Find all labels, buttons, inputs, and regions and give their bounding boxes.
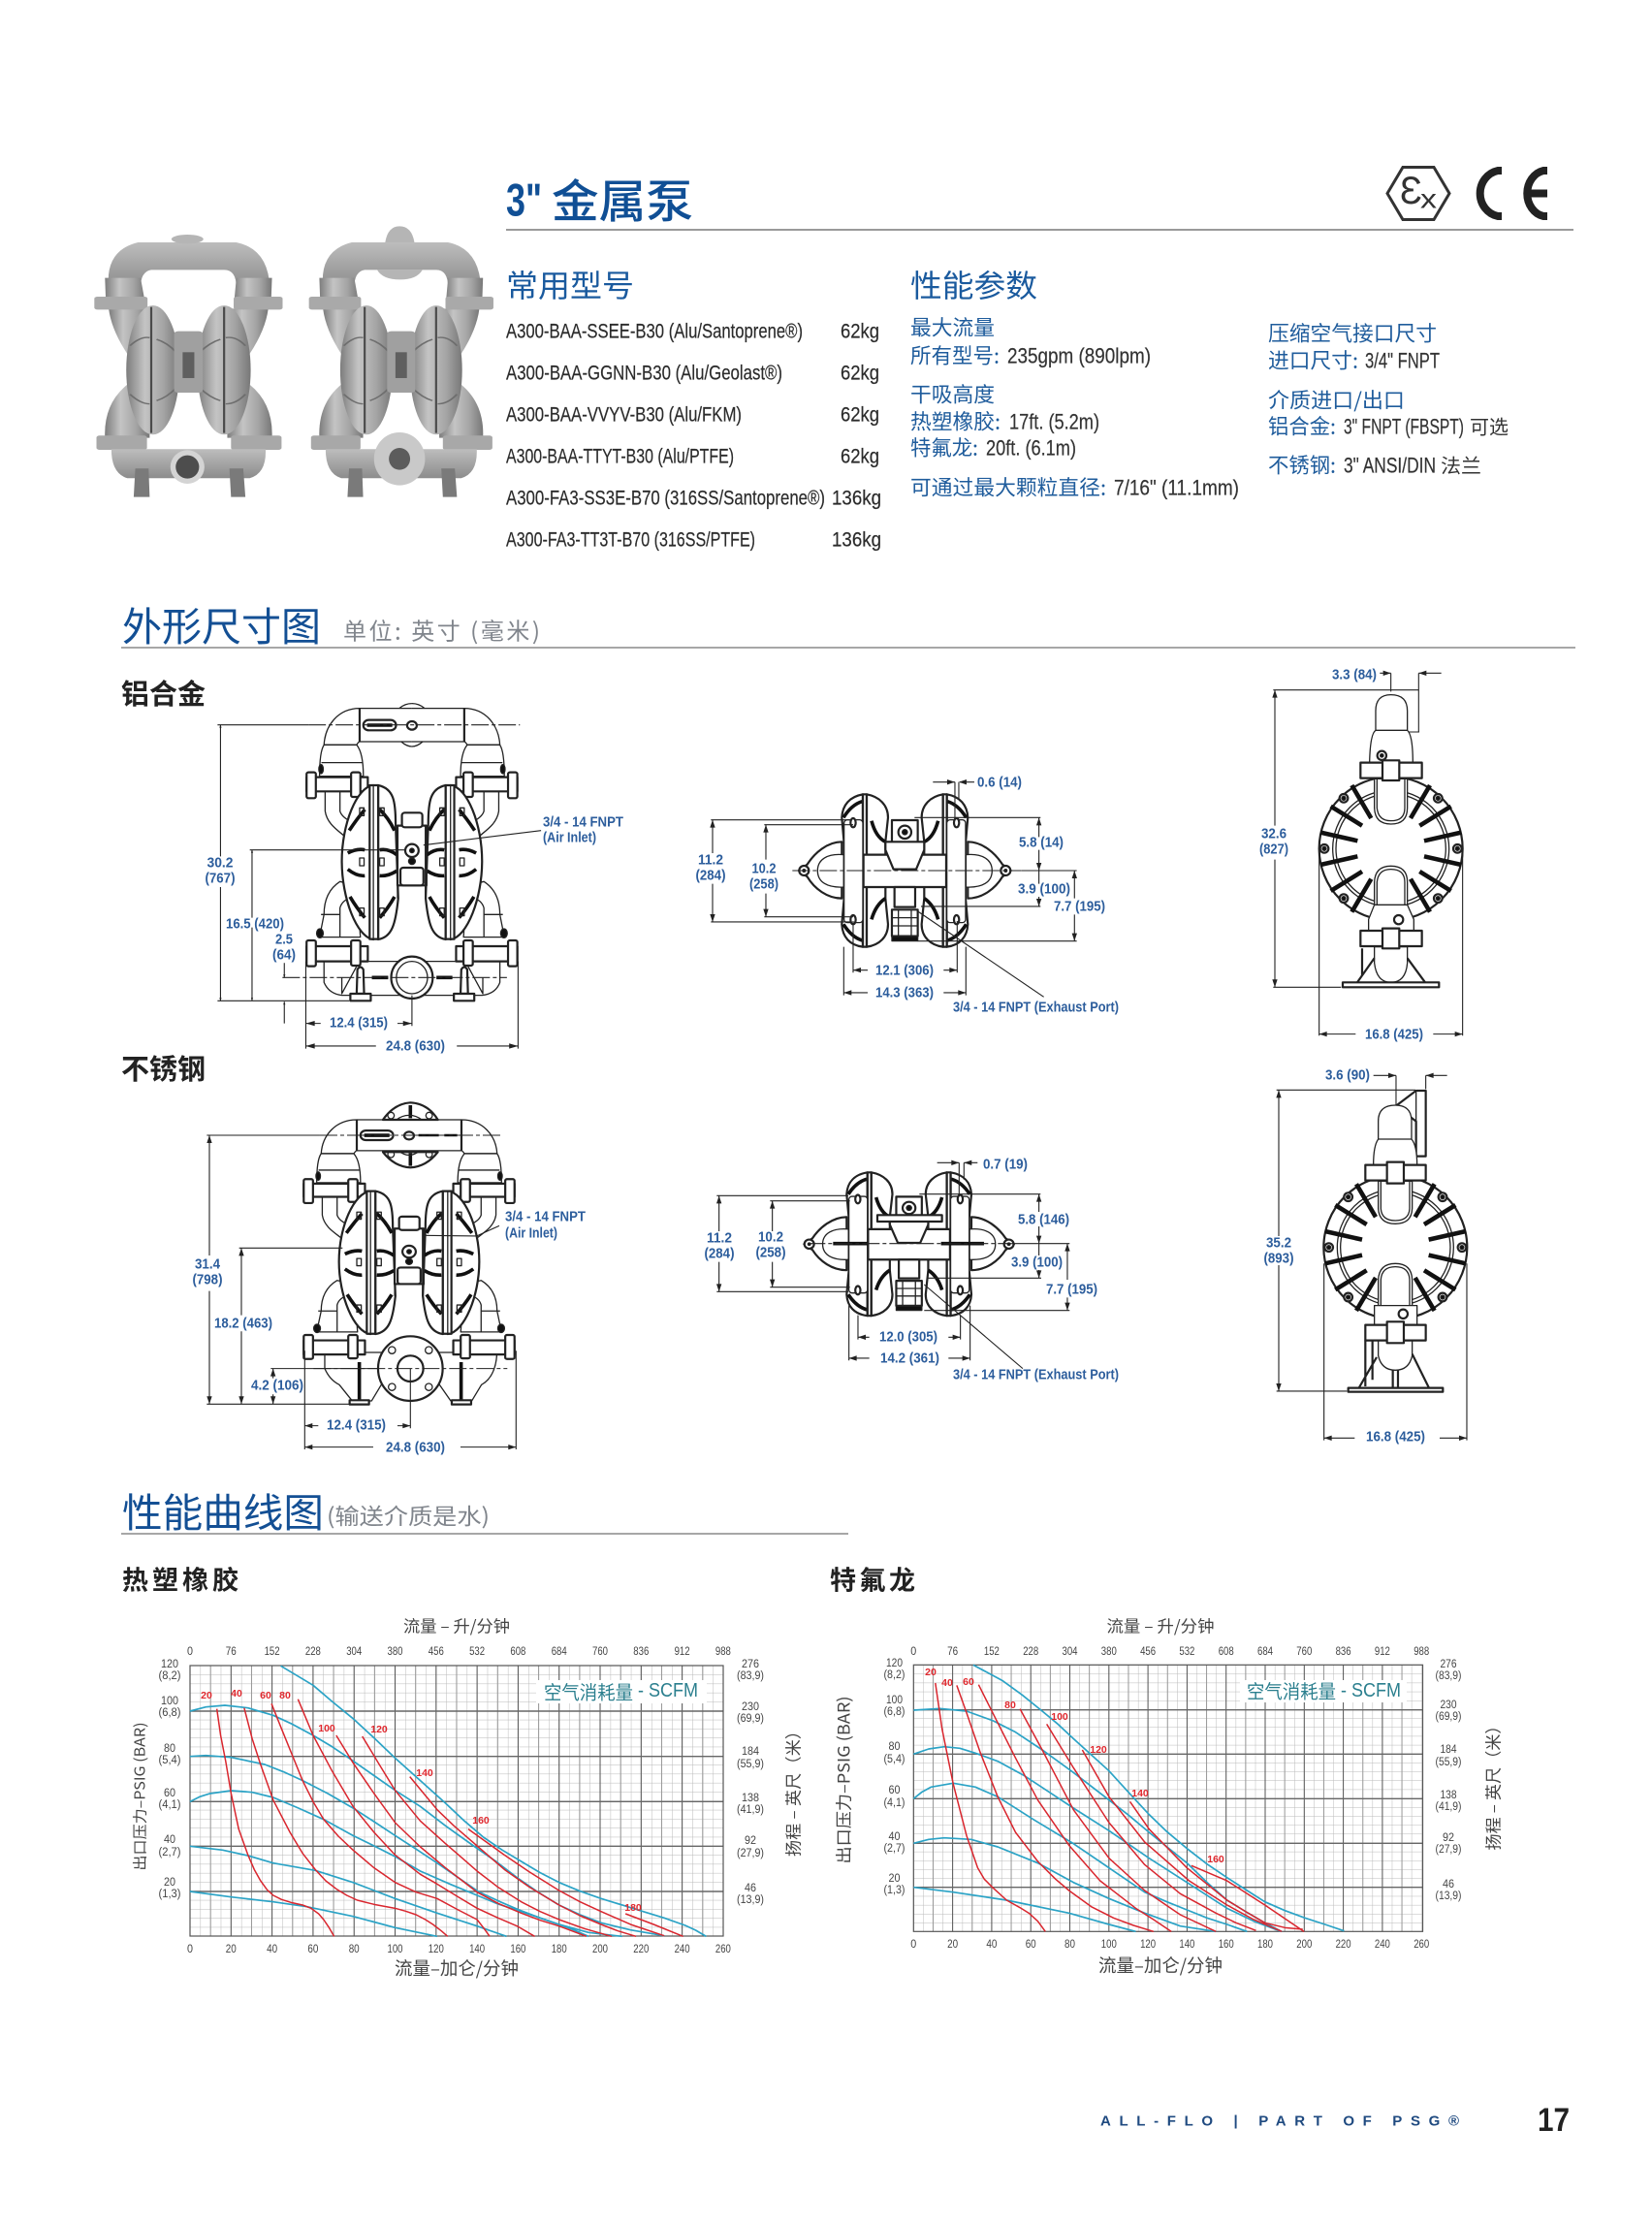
dimension labels: aluminium top view: 14.3 (363) [875,985,934,1001]
curve labels: 80 [279,1690,291,1701]
dimension labels: stainless top view: 11.2 [707,1229,732,1247]
axis titles: 扬程 – 英尺（米） [1479,1718,1505,1850]
dimension labels: stainless front view: 31.4 [195,1256,221,1272]
bottom axis: 60 [1026,1939,1036,1951]
pressure curves [190,1666,706,1936]
top axis: 380 [388,1646,403,1658]
panel: performance parameters: 所有型号: [910,339,1000,370]
bottom axis: 220 [633,1944,649,1955]
dimension labels: aluminium front view: 24.8 (630) [386,1037,445,1055]
right axis: (27,9) [1435,1844,1462,1856]
left axis: 120 [161,1659,178,1670]
dimension labels: stainless top view: 10.2 [758,1229,783,1245]
right axis: (55,9) [737,1759,764,1770]
left axis: (6,8) [884,1706,905,1718]
icon: Ex certification mark [1387,167,1449,219]
panel: common models: A300-BAA-VVYV-B30 (Alu/FKM) [506,403,742,427]
dimension labels: stainless side view: 3.6 (90) [1325,1066,1370,1084]
left axis [159,1659,181,1900]
axis titles: 流量 – 升/分钟 [403,1613,510,1636]
heading: performance curves [121,1480,848,1539]
left axis: 120 [886,1658,903,1669]
top axis: 760 [1296,1646,1312,1658]
left axis: 80 [888,1741,900,1753]
dimension labels: stainless front view [192,1208,586,1456]
dimension labels: aluminium front view: 30.2 [207,855,233,871]
dimension labels: aluminium front view [206,814,623,1055]
curve labels: 60 [963,1676,974,1688]
panel: connection sizes: 进口尺寸: [1268,345,1358,374]
top axis: 304 [346,1646,363,1658]
heading: outline dimensions: 单位: 英寸 (毫米) [343,613,540,646]
panel: connection sizes: 法兰 [1441,450,1481,479]
top axis: 608 [1219,1646,1234,1658]
panel: performance parameters: 干吸高度 [910,378,995,409]
right axis: (27,9) [737,1848,764,1859]
icon: Ex certification mark: x [1420,184,1437,213]
top axis: 760 [592,1646,608,1658]
dimension labels: aluminium top view: 0.6 (14) [977,774,1022,791]
left axis: 20 [888,1873,900,1885]
panel: common models: 136kg [832,529,881,551]
bottom axis: 240 [1375,1939,1390,1951]
top axis: 152 [265,1646,280,1658]
dimension labels: stainless side view: (893) [1264,1251,1293,1266]
left axis: (4,1) [159,1799,181,1811]
dimension labels: aluminium front view: 2.5 [275,931,293,948]
drawing: stainless side view [1276,1073,1467,1441]
chart: PTFE performance [830,1613,1505,1978]
top axis: 76 [947,1646,958,1658]
right axis: (41,9) [737,1804,764,1816]
right axis: (13,9) [737,1894,764,1906]
right axis: 138 [1441,1790,1456,1801]
dimension labels: aluminium top view: 11.2 [698,851,723,869]
dimension labels: aluminium side view: 32.6 [1261,826,1287,842]
heading: outline dimensions [121,594,1575,652]
curve labels: 120 [370,1724,388,1735]
top axis: 912 [675,1646,690,1658]
drawing: aluminium front view [217,704,541,1049]
heading: performance curves: (输送介质是水) [327,1498,490,1531]
drawing: aluminium top view [710,779,1077,997]
dimension labels: stainless front view: 3/4 - 14 FNPT [505,1208,586,1225]
curve labels: 180 [624,1902,642,1914]
heading: stainless steel: 不锈钢 [121,1047,206,1088]
panel: connection sizes: 3/4" FNPT [1365,349,1440,372]
dimension labels: aluminium front view: 12.4 (315) [330,1014,388,1032]
legend: air consumption: 空气消耗量 [1247,1675,1336,1704]
right axis: 184 [1441,1744,1457,1756]
curve labels: 100 [1051,1711,1068,1723]
bottom axis: 20 [226,1944,237,1955]
heading: performance curves: 性能曲线图 [122,1480,324,1539]
axis titles: 出口压力–PSIG (BAR) [130,1722,149,1871]
panel: performance parameters: 特氟龙: [910,432,978,461]
legend: air consumption [1240,1675,1407,1704]
heading: thermoplastic rubber: 热塑橡胶 [122,1559,238,1598]
left axis: 100 [886,1695,903,1706]
right axis: 184 [742,1746,760,1758]
top axis: 228 [305,1646,321,1658]
dimension labels: aluminium front view: (767) [206,871,235,886]
panel: common models: 136kg [832,487,881,510]
top axis: 532 [469,1646,485,1658]
left axis: (2,7) [159,1847,181,1859]
dimension labels: aluminium top view: 3.9 (100) [1018,880,1070,898]
axis titles [830,1613,1505,1978]
left axis: (1,3) [159,1889,181,1900]
title [506,165,1573,231]
legend: air consumption [536,1677,707,1704]
top axis: 0 [187,1646,193,1658]
heading: aluminium: 铝合金 [121,672,206,713]
legend: air consumption: - SCFM [638,1680,698,1701]
legend: air consumption: 空气消耗量 [544,1677,633,1704]
panel: performance parameters: 235gpm (890lpm) [1007,343,1151,368]
bottom axis: 260 [715,1944,731,1955]
top axis: 152 [984,1646,1000,1658]
top axis: 988 [715,1646,731,1658]
panel: common models: 62kg [841,363,879,384]
bottom axis: 20 [947,1939,958,1951]
left axis: (8,2) [884,1669,905,1681]
legend: air consumption: - SCFM [1341,1680,1401,1701]
left axis: (4,1) [884,1797,905,1809]
top axis: 684 [552,1646,567,1658]
axis titles: 流量–加仑/分钟 [1098,1953,1223,1978]
air flow curves [217,1700,683,1936]
axis titles: 出口压力–PSIG (BAR) [830,1697,855,1863]
dimension labels: stainless top view: 7.7 (195) [1046,1282,1097,1297]
bottom axis: 160 [1219,1939,1234,1951]
left axis: 100 [161,1696,178,1707]
panel: performance parameters: 20ft. (6.1m) [986,436,1076,460]
panel: common models: 62kg [841,446,879,467]
panel: connection sizes: 铝合金: [1268,411,1336,440]
left axis: 60 [164,1788,175,1799]
dimension labels: stainless top view: 5.8 (146) [1018,1212,1069,1227]
left axis: 60 [888,1785,900,1796]
air flow curves [936,1683,1304,1931]
bottom axis: 180 [1257,1939,1273,1951]
dimension labels: stainless front view: (798) [192,1272,223,1287]
heading: PTFE: 特氟龙 [830,1559,915,1598]
dimension labels: stainless side view [1264,1066,1425,1445]
bottom axis: 200 [1296,1939,1312,1951]
curve labels: 60 [260,1690,271,1701]
footer brand: ALL-FLO | PART OF PSG® [1100,2113,1459,2129]
panel: common models: A300-BAA-GGNN-B30 (Alu/Geolast®) [506,363,782,384]
dimension labels: aluminium top view [696,774,1119,1016]
axis titles: 流量–加仑/分钟 [395,1955,519,1981]
panel: common models [506,262,881,551]
top axis: 304 [1063,1646,1078,1658]
curve labels: 160 [472,1815,490,1827]
panel: performance parameters: 性能参数 [910,262,1037,306]
icon: CE mark [1480,171,1547,216]
dimension labels: aluminium front view: 16.5 (420) [226,915,284,933]
dimension labels: stainless top view: 3.9 (100) [1011,1255,1063,1270]
right axis: 276 [742,1659,759,1670]
curve labels: 20 [925,1667,937,1678]
chart grid [190,1666,723,1936]
panel: connection sizes [1268,318,1509,479]
top axis: 456 [1140,1646,1156,1658]
bottom axis: 0 [187,1944,193,1955]
dimension labels: stainless top view: 12.0 (305) [879,1328,937,1346]
dimension labels: aluminium top view: 3/4 - 14 FNPT (Exhaust Port) [953,999,1119,1016]
right axis: 92 [745,1835,756,1847]
top axis: 76 [226,1646,237,1658]
left axis: 80 [164,1743,175,1755]
right axis: (55,9) [1435,1757,1462,1768]
left axis: 20 [164,1877,175,1889]
right axis: (13,9) [1435,1890,1462,1902]
dimension labels: aluminium side view: 16.8 (425) [1365,1026,1423,1043]
curve labels: 140 [416,1767,433,1779]
curve labels: 140 [1131,1788,1149,1799]
title: 3" [506,175,542,225]
panel: performance parameters: 17ft. (5.2m) [1009,409,1099,434]
panel: common models: A300-BAA-TTYT-B30 (Alu/PTFE) [506,446,734,467]
pressure curves [913,1665,1344,1931]
drawing: stainless top view [716,1160,1070,1369]
top axis: 0 [910,1646,916,1658]
curve labels: 120 [1090,1744,1107,1756]
curve labels [925,1667,1224,1865]
panel: connection sizes: 3" ANSI/DIN [1344,454,1436,477]
right axis: (69,9) [1435,1711,1462,1723]
right axis [1435,1659,1462,1902]
right axis: 230 [742,1701,759,1713]
dimension labels: stainless front view: 18.2 (463) [214,1315,272,1332]
dimension labels: aluminium side view: (827) [1259,842,1288,857]
dimension labels: aluminium top view: (258) [749,876,778,892]
curve labels: 80 [1004,1700,1016,1711]
dimension labels: aluminium front view: (64) [272,946,296,964]
right axis: 46 [1443,1879,1454,1890]
curve labels: 160 [1207,1854,1224,1865]
bottom axis: 80 [349,1944,360,1955]
top axis: 836 [633,1646,649,1658]
dimension labels: stainless front view: 12.4 (315) [327,1417,386,1433]
panel: performance parameters: 7/16" (11.1mm) [1114,475,1239,500]
curve labels: 40 [941,1677,953,1689]
right axis: 46 [745,1883,756,1894]
bottom axis [187,1944,731,1955]
curve labels: 20 [201,1690,212,1701]
top axis: 380 [1101,1646,1117,1658]
right axis: (83,9) [1435,1670,1462,1682]
dimension labels: aluminium top view: 10.2 [752,861,776,876]
axis titles: 扬程 – 英尺（米） [779,1723,805,1857]
panel: connection sizes: 介质进口/出口 [1268,384,1405,415]
bottom axis: 40 [267,1944,277,1955]
dimension labels: aluminium side view: 3.3 (84) [1332,667,1377,683]
left axis: (1,3) [884,1885,905,1896]
top axis: 532 [1179,1646,1194,1658]
icon: Ex certification mark: Ɛ [1400,170,1422,212]
page number: 17 [1538,2102,1570,2139]
chart: thermoplastic rubber performance [130,1613,805,1981]
curve labels: 100 [318,1723,335,1734]
left axis: (6,8) [159,1707,181,1719]
chart grid [913,1665,1423,1931]
bottom axis: 240 [675,1944,690,1955]
panel: connection sizes: 不锈钢: [1268,450,1336,479]
title: 金属泵 [552,165,693,231]
dimension labels: stainless top view [704,1156,1119,1382]
dimension labels: stainless front view: 4.2 (106) [251,1377,303,1394]
photo: aluminium pump [94,235,283,497]
right axis: (69,9) [737,1713,764,1725]
curve labels: 40 [231,1688,242,1700]
panel: common models: 62kg [841,320,879,343]
bottom axis: 140 [1179,1939,1194,1951]
top axis [910,1646,1429,1658]
right axis: (83,9) [737,1670,764,1682]
top axis: 836 [1336,1646,1351,1658]
dimension labels: stainless top view: 3/4 - 14 FNPT (Exhaust Port) [953,1367,1119,1382]
drawing: aluminium side view [1272,671,1463,1036]
bottom axis: 120 [1140,1939,1156,1951]
left axis: 40 [164,1834,175,1846]
panel: common models: 62kg [841,403,879,427]
right axis [737,1659,764,1906]
panel: connection sizes: 可选 [1470,411,1509,440]
bottom axis: 0 [910,1939,916,1951]
dimension labels: stainless front view: (Air Inlet) [505,1225,557,1241]
bottom axis: 140 [469,1944,485,1955]
dimension labels: aluminium top view: (284) [696,867,725,884]
bottom axis: 100 [1101,1939,1117,1951]
dimension labels: stainless front view: 24.8 (630) [386,1439,445,1456]
top axis: 684 [1257,1646,1274,1658]
bottom axis: 120 [429,1944,444,1955]
drawing: stainless front view [206,1102,516,1449]
bottom axis: 180 [552,1944,567,1955]
top axis: 228 [1023,1646,1038,1658]
dimension labels: aluminium side view [1259,667,1423,1043]
dimension labels: stainless top view: (258) [756,1245,785,1260]
top axis: 456 [429,1646,444,1658]
bottom axis: 260 [1414,1939,1429,1951]
right axis: (41,9) [1435,1801,1462,1813]
bottom axis: 40 [986,1939,997,1951]
left axis: (8,2) [159,1670,181,1682]
right axis: 276 [1441,1659,1456,1670]
top axis [187,1646,731,1658]
bottom axis: 60 [307,1944,318,1955]
panel: connection sizes: 3" FNPT (FBSPT) [1344,415,1464,438]
top axis: 608 [510,1646,525,1658]
panel: common models: A300-BAA-SSEE-B30 (Alu/Santoprene®) [506,320,803,343]
panel: common models: A300-FA3-TT3T-B70 (316SS/PTFE) [506,529,755,551]
left axis: (5,4) [884,1754,905,1765]
left axis: (2,7) [884,1843,905,1855]
panel: performance parameters: 最大流量 [910,312,995,341]
heading: outline dimensions: 外形尺寸图 [122,594,321,652]
left axis: 40 [888,1831,900,1843]
axis titles [130,1613,805,1981]
dimension labels: aluminium front view: (Air Inlet) [543,830,596,845]
dimension labels: stainless top view: 14.2 (361) [880,1350,939,1367]
panel: performance parameters [910,262,1239,502]
panel: common models: A300-FA3-SS3E-B70 (316SS/Santoprene®) [506,487,825,510]
dimension labels: stainless side view: 16.8 (425) [1366,1429,1425,1445]
dimension labels: aluminium top view: 7.7 (195) [1054,898,1105,915]
dimension labels: aluminium top view: 12.1 (306) [875,962,934,979]
panel: connection sizes: 压缩空气接口尺寸 [1268,318,1437,347]
bottom axis: 220 [1336,1939,1351,1951]
right axis: 230 [1441,1700,1456,1711]
bottom axis: 160 [510,1944,525,1955]
dimension labels: stainless top view: (284) [704,1245,735,1262]
panel: performance parameters: 可通过最大颗粒直径: [910,471,1106,502]
panel: performance parameters: 热塑橡胶: [910,405,1001,436]
right axis: 138 [742,1793,759,1804]
dimension labels: stainless top view: 0.7 (19) [983,1156,1028,1173]
bottom axis [910,1939,1429,1951]
bottom axis: 80 [1064,1939,1075,1951]
bottom axis: 100 [388,1944,403,1955]
bottom axis: 200 [592,1944,608,1955]
right axis: 92 [1443,1832,1454,1844]
panel: common models: 常用型号 [506,262,634,306]
curve labels [201,1688,642,1914]
dimension labels: stainless side view: 35.2 [1266,1235,1291,1251]
photo: stainless pump [309,226,493,497]
dimension labels: aluminium top view: 5.8 (14) [1019,834,1064,851]
top axis: 988 [1414,1646,1429,1658]
top axis: 912 [1375,1646,1390,1658]
left axis [884,1658,905,1896]
dimension labels: aluminium front view: 3/4 - 14 FNPT [543,814,623,830]
axis titles: 流量 – 升/分钟 [1107,1613,1214,1636]
left axis: (5,4) [159,1755,181,1766]
